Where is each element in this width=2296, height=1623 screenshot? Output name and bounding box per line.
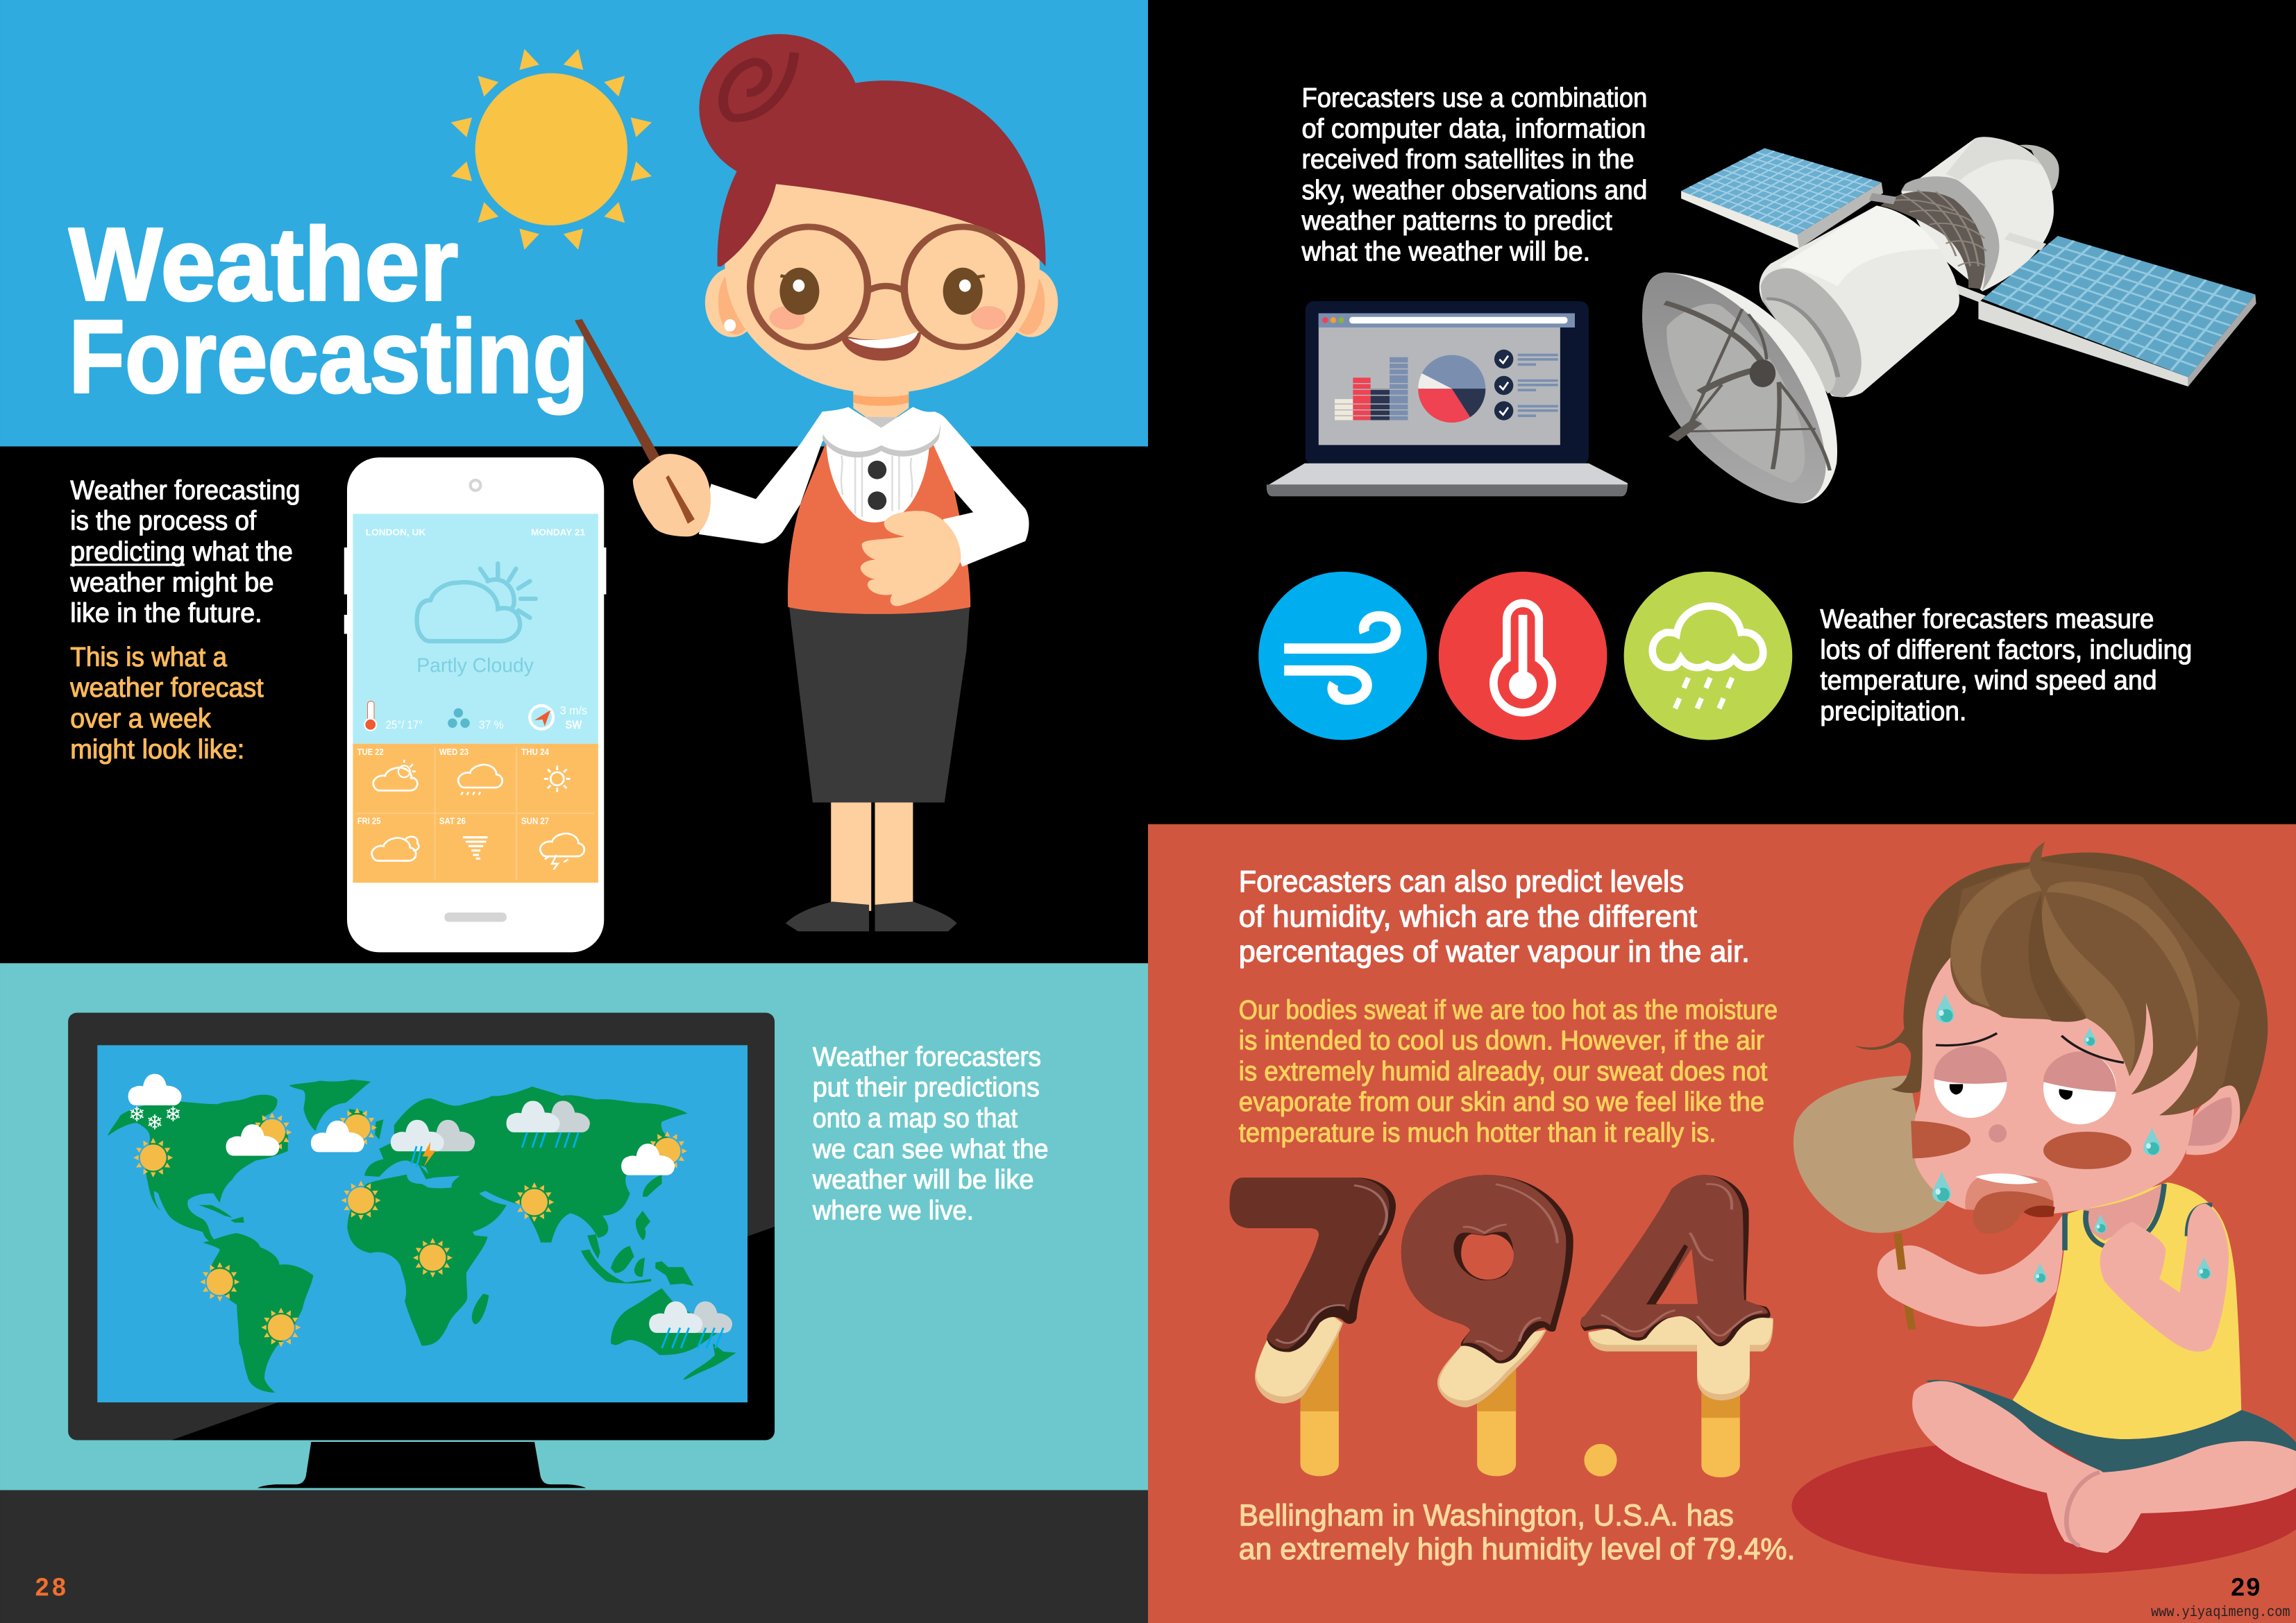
- glasses: [750, 227, 1022, 347]
- text block: introduction: predicting what the: [70, 537, 293, 567]
- text block: forecasters combination: Forecasters use a combination: [1302, 83, 1647, 113]
- blouse bib: [827, 442, 929, 522]
- text block: forecast lead-in: might look like:: [70, 735, 244, 765]
- icon: forecast cloud sun: [373, 760, 417, 790]
- icon: thermometer: [1439, 572, 1607, 740]
- fan: [1793, 1076, 1949, 1233]
- hand on belly: [861, 511, 961, 606]
- map snowflakes: ❄: [146, 1111, 163, 1135]
- eyes: [1934, 1046, 2116, 1124]
- text block: introduction: like in the future.: [70, 599, 262, 629]
- text block: forecasters combination: weather patterns to predict: [1301, 206, 1612, 236]
- text block: forecasters combination: what the weather will be.: [1301, 237, 1590, 267]
- page number 29: 29: [2231, 1574, 2260, 1601]
- text block: humidity heading: [1239, 865, 1750, 969]
- face: [1913, 958, 2199, 1214]
- phone with weather forecast: FRI 25: [357, 817, 381, 826]
- blush: [770, 306, 1006, 330]
- panel: teal map background: [0, 963, 1148, 1490]
- text block: forecast lead-in: [69, 643, 264, 765]
- map rain cloud over Australia: [649, 1302, 732, 1348]
- phone with weather forecast: [344, 457, 606, 952]
- text block: sweat explanation: temperature is much hotter than it really is.: [1239, 1119, 1716, 1148]
- icon: wind: [1258, 572, 1427, 740]
- text block: forecast lead-in: over a week: [70, 704, 211, 734]
- mesh band: [1881, 190, 1986, 289]
- map sun icons: [133, 1108, 687, 1348]
- collar: [822, 407, 940, 457]
- hair back: [1855, 853, 2268, 1143]
- text block: sweat explanation: evaporate from our skin and so we feel like the: [1239, 1087, 1764, 1117]
- neck: [2083, 1184, 2163, 1241]
- legs and shoes: [786, 799, 957, 931]
- text block: Bellingham fact: an extremely high humidity level of 79.4%.: [1239, 1533, 1795, 1566]
- text block: humidity heading: Forecasters can also predict levels: [1239, 865, 1684, 899]
- fan stick upper: [1898, 1233, 1902, 1270]
- map rain cloud over Asia: [507, 1101, 590, 1148]
- icon: compass: [530, 706, 553, 729]
- ear: [2186, 1085, 2240, 1155]
- hand holding pointer: [633, 454, 711, 536]
- right arm: [2100, 1204, 2229, 1352]
- phone with weather forecast: SAT 26: [439, 817, 466, 826]
- tv screen: [97, 1045, 748, 1402]
- text block: map explanation: where we live.: [812, 1196, 974, 1225]
- tv frame: [68, 1012, 775, 1441]
- map white clouds: [128, 1074, 675, 1175]
- text block: introduction: Weather forecasting: [70, 475, 300, 505]
- phone with weather forecast: TUE 22: [357, 747, 384, 757]
- arms and legs: [1877, 1184, 2296, 1553]
- icon: forecast storm: [540, 833, 584, 869]
- text block: factors measured: precipitation.: [1820, 697, 1966, 726]
- panel: red humidity background: [1148, 824, 2296, 1623]
- text block: map explanation: weather will be like: [812, 1165, 1033, 1195]
- text block: forecasters combination: [1301, 83, 1647, 267]
- phone with weather forecast: 37 %: [479, 718, 504, 731]
- text block: humidity heading: of humidity, which are the different: [1239, 900, 1697, 933]
- text block: introduction: weather might be: [69, 568, 274, 597]
- text block: factors measured: [1820, 604, 2192, 726]
- torso: [699, 389, 1029, 614]
- text block: humidity heading: percentages of water vapour in the air.: [1239, 935, 1750, 969]
- popsicle sticks: [1300, 1327, 1740, 1477]
- shin and foot: [2068, 1441, 2296, 1552]
- title: Forecasting: [69, 298, 589, 414]
- phone with weather forecast: THU 24: [521, 747, 549, 757]
- text block: forecasters combination: sky, weather observations and: [1302, 176, 1647, 205]
- page number 28: 28: [35, 1574, 66, 1601]
- digit 9: [1401, 1175, 1573, 1407]
- floor shadow: [1791, 1438, 2296, 1574]
- phone with weather forecast: 25°/ 17°: [386, 718, 423, 731]
- main cylinder: [1759, 205, 1959, 398]
- icon: sun: [448, 46, 655, 253]
- phone with weather forecast: WED 23: [439, 747, 469, 757]
- nose and cheeks: [1911, 1121, 2132, 1169]
- text block: map explanation: put their predictions: [813, 1073, 1040, 1103]
- phone with weather forecast: SW: [565, 718, 582, 731]
- panel: dark footer band: [0, 1490, 1148, 1623]
- text block: map explanation: we can see what the: [812, 1135, 1049, 1164]
- sweat drops on face: [1932, 994, 2161, 1233]
- eyebrows: [1936, 1033, 2124, 1062]
- shirt trim: [2065, 1184, 2212, 1250]
- phone with weather forecast: MONDAY 21: [531, 528, 585, 538]
- mouth and tongue: [1965, 1173, 2055, 1234]
- sweat drops on arms: [2034, 1257, 2211, 1283]
- right solar panel: [1978, 236, 2256, 386]
- fan stick lower: [1907, 1301, 1912, 1329]
- head: [1911, 842, 2265, 1234]
- illustration: woman with pointer: [575, 34, 1058, 931]
- sleeves: [699, 407, 1029, 567]
- text block: forecast lead-in: weather forecast: [69, 673, 264, 703]
- bar chart: [1335, 357, 1408, 420]
- text block: sweat explanation: [1239, 995, 1778, 1148]
- icon: humidity drops: [448, 708, 470, 728]
- text block: Bellingham fact: Bellingham in Washington, U.S.A. has: [1239, 1499, 1734, 1532]
- phone with weather forecast: LONDON, UK: [366, 528, 426, 538]
- thigh: [1912, 1381, 2141, 1553]
- digit 4: [1580, 1175, 1773, 1400]
- tv stand: [258, 1442, 586, 1488]
- hair fringe: [1950, 842, 2265, 1115]
- left arm: [1877, 1214, 2065, 1327]
- text block: sweat explanation: is intended to cool us down. However, if the air: [1239, 1026, 1764, 1056]
- icon: forecast tornado: [463, 838, 488, 858]
- face: [725, 139, 1040, 393]
- icon: forecast sunny: [544, 765, 571, 792]
- panel arms: [1871, 197, 1895, 201]
- neck: [853, 389, 909, 428]
- text block: factors measured: lots of different factors, including: [1820, 635, 2192, 665]
- pointer: [575, 319, 663, 465]
- text block: forecasters combination: of computer data, information: [1302, 114, 1646, 144]
- hair bun: [699, 34, 860, 182]
- skirt: [788, 601, 970, 802]
- illustration: laptop with charts: [1267, 301, 1628, 496]
- eyes: [779, 268, 985, 315]
- pie chart: [1418, 355, 1485, 423]
- laptop base: [1267, 464, 1628, 496]
- text block: factors measured: Weather forecasters measure: [1820, 604, 2154, 634]
- map snowflakes: ❄: [128, 1103, 146, 1126]
- text block: introduction: is the process of: [70, 507, 256, 536]
- icon: thermometer: [364, 702, 376, 731]
- text block: map explanation: onto a map so that: [813, 1103, 1018, 1133]
- digit 7: [1230, 1178, 1396, 1404]
- phone with weather forecast: 3 m/s: [560, 704, 587, 717]
- left solar panel: [1681, 148, 1883, 248]
- checklist: [1494, 350, 1558, 420]
- mouth: [841, 332, 921, 361]
- title: Weather: [69, 205, 458, 322]
- tank top: [2013, 1182, 2241, 1439]
- text block: forecasters combination: received from satellites in the: [1302, 145, 1634, 175]
- illustration: sweating child with fan: [1791, 842, 2296, 1574]
- icon: partly cloudy: [417, 563, 536, 641]
- icon: rain cloud: [1624, 572, 1792, 740]
- panel: blue title background: [0, 0, 1148, 446]
- shorts: [1926, 1380, 2296, 1474]
- vest: [788, 442, 970, 614]
- panel: black right top background: [1148, 0, 2296, 824]
- text block: Bellingham fact: [1239, 1499, 1795, 1566]
- title: [69, 205, 589, 414]
- satellite dish: [1642, 273, 1837, 503]
- icon: forecast cloudy: [372, 837, 419, 860]
- ears: [705, 268, 1058, 337]
- text block: forecast lead-in: This is what a: [70, 643, 227, 672]
- text block: map explanation: Weather forecasters: [813, 1042, 1041, 1072]
- text block: sweat explanation: is extremely humid already, our sweat does not: [1239, 1057, 1768, 1087]
- rear module: [1901, 137, 2054, 291]
- illustration: satellite: [1642, 137, 2256, 503]
- phone with weather forecast: Partly Cloudy: [416, 654, 534, 677]
- illustration: television with world weather map: [68, 1012, 775, 1488]
- phone with weather forecast: SUN 27: [521, 817, 549, 826]
- text block: factors measured: temperature, wind speed and: [1820, 666, 2157, 696]
- rear cap: [2019, 145, 2059, 192]
- world map continents: [108, 1080, 736, 1393]
- illustration: melting popsicle number 79.4: [1230, 1175, 1773, 1477]
- icon: forecast rain: [458, 765, 503, 795]
- text block: introduction: [69, 475, 300, 629]
- ankle line: [2066, 1472, 2100, 1546]
- map snowflakes: [128, 1103, 182, 1135]
- panel: black introduction background: [0, 446, 1148, 963]
- hair: [718, 80, 1045, 266]
- head: [575, 34, 1058, 465]
- text block: sweat explanation: Our bodies sweat if we are too hot as the moisture: [1239, 995, 1778, 1025]
- text block: map explanation: [812, 1042, 1049, 1225]
- map storm cloud over Europe: [391, 1120, 475, 1166]
- map snowflakes: ❄: [164, 1103, 182, 1126]
